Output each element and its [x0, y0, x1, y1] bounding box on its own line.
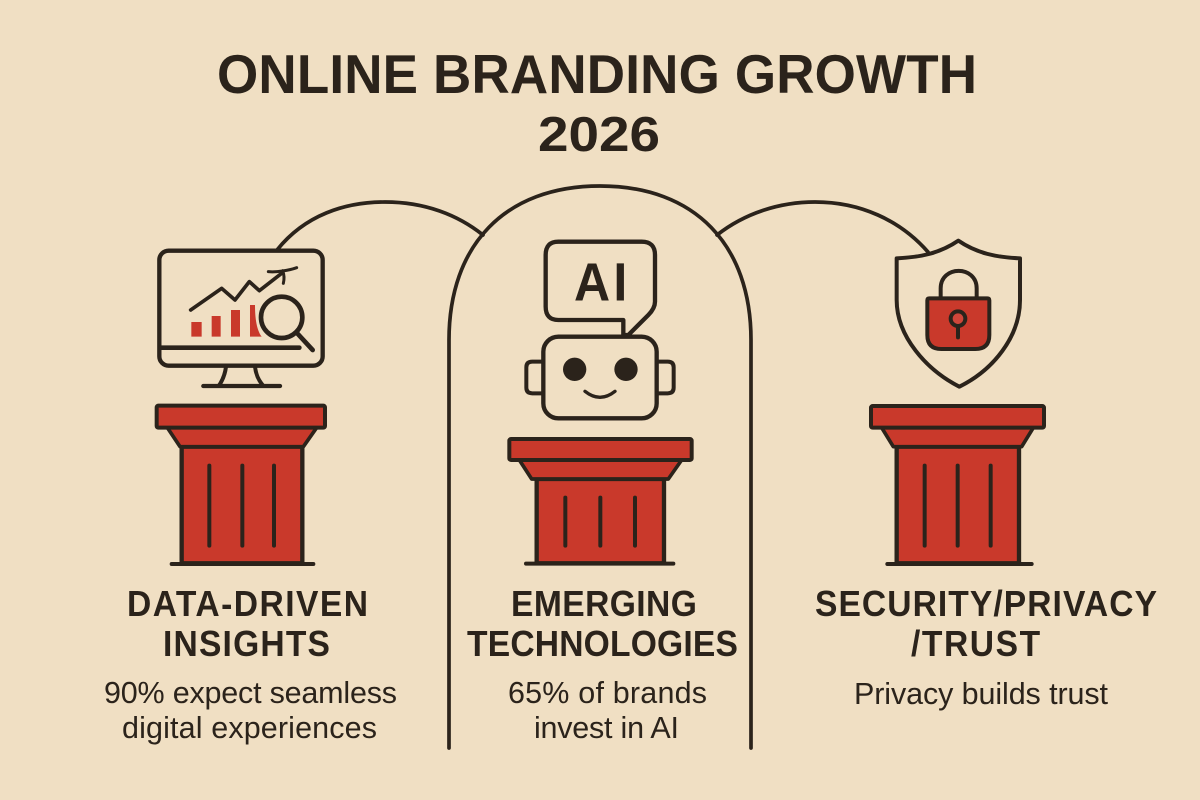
- pedestal: left: [157, 406, 325, 564]
- text block: data-driven insights: 90% expect seamless: [104, 676, 397, 710]
- text block: data-driven insights: DATA-DRIVEN: [127, 584, 368, 624]
- text block: security privacy trust: /TRUST: [911, 624, 1040, 664]
- text block: emerging technologies: 65% of brands: [508, 676, 707, 710]
- title: 2026: [538, 108, 660, 162]
- text block: emerging technologies: EMERGING: [511, 584, 697, 624]
- pedestal: centre: [509, 439, 692, 564]
- icon: AI speech bubble and robot: [526, 242, 674, 418]
- text block: data-driven insights: INSIGHTS: [163, 624, 330, 664]
- icon: AI speech bubble and robot: A: [574, 253, 610, 313]
- text block: emerging technologies: invest in AI: [534, 711, 679, 745]
- title: ONLINE BRANDING GROWTH: [217, 44, 977, 105]
- title: [217, 44, 977, 162]
- icon: AI speech bubble and robot: I: [613, 253, 627, 313]
- text block: security privacy trust: [815, 584, 1157, 711]
- text block: emerging technologies: [467, 584, 738, 745]
- text block: security privacy trust: Privacy builds trust: [854, 677, 1109, 711]
- connecting arch lines: [277, 186, 928, 748]
- text block: security privacy trust: SECURITY/PRIVACY: [815, 584, 1157, 624]
- text block: emerging technologies: TECHNOLOGIES: [467, 624, 738, 664]
- icon: monitor with chart and magnifier: [159, 251, 323, 386]
- icon: shield with padlock: [897, 241, 1020, 387]
- text block: data-driven insights: digital experiences: [122, 711, 377, 745]
- pedestal: right: [871, 406, 1044, 564]
- text block: data-driven insights: [104, 584, 397, 745]
